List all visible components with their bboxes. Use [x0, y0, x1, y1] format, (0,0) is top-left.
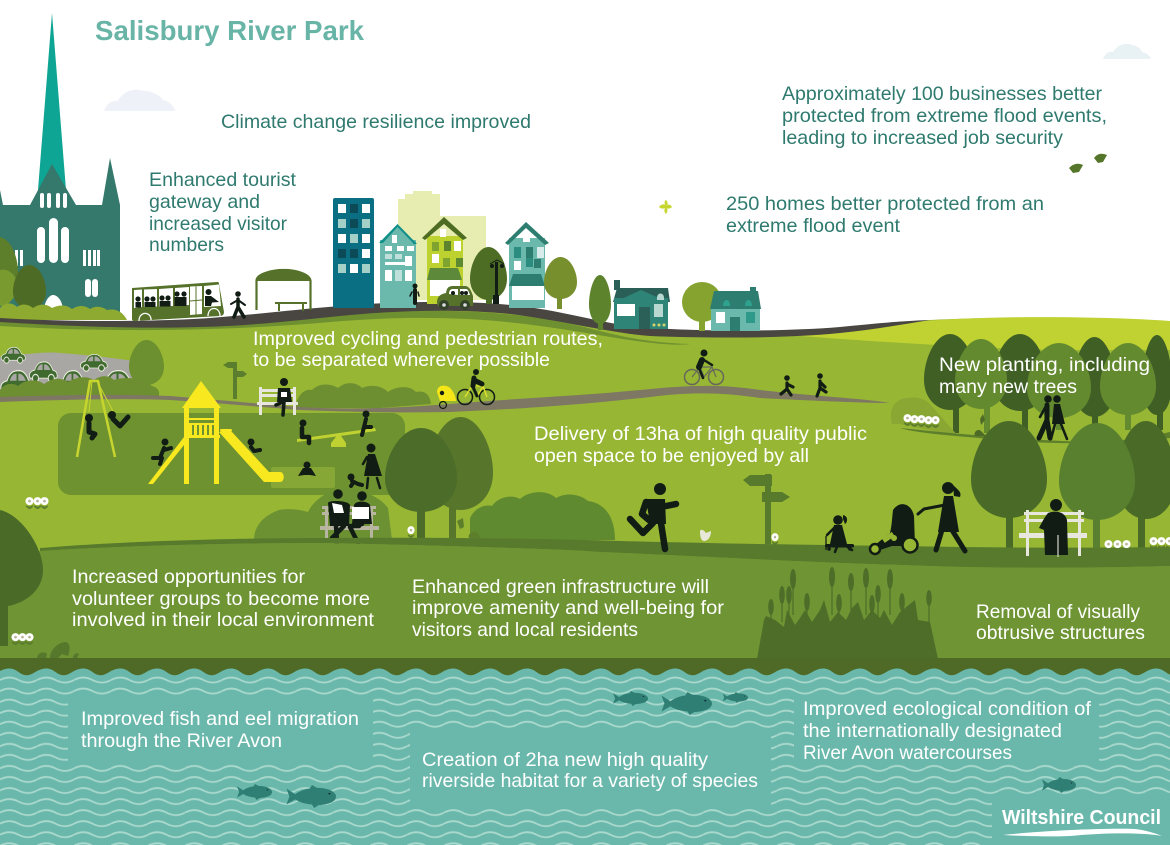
text: public open space: Delivery of 13ha of high quality public [534, 423, 867, 445]
text: businesses protected [782, 83, 1107, 149]
text: riverside habitat: Creation of 2ha new high quality [422, 749, 708, 771]
text: cycling routes: Improved cycling and pedestrian routes, [253, 328, 603, 350]
text: homes protected: extreme flood event [726, 215, 901, 237]
bank scallop edge [0, 668, 1170, 678]
crawling baby [348, 474, 362, 486]
child climbing [153, 438, 171, 464]
street tree olive [544, 257, 577, 309]
fish group bottom [237, 784, 336, 808]
cathedral body [0, 158, 120, 312]
running child 1 [781, 375, 793, 395]
river waves [0, 674, 1170, 845]
reed heads [768, 567, 932, 615]
text: ecological condition: Improved ecological condition of [803, 698, 1092, 720]
swing frame [77, 381, 115, 457]
text: visually obtrusive [976, 601, 1145, 644]
bus passengers [135, 289, 219, 308]
house teal [379, 224, 417, 308]
spire [38, 13, 66, 190]
text: new planting [939, 354, 1150, 398]
text: public open space: open space to be enjoyed by all [534, 445, 809, 467]
girl on scooter [825, 515, 854, 552]
logo: Wiltshire Council: Wiltshire Council [1002, 807, 1161, 829]
bus body [132, 282, 224, 321]
cottage light [710, 287, 761, 331]
lower green meadow [0, 543, 1170, 660]
bus shelter [256, 270, 311, 311]
river [0, 668, 1170, 845]
street tree dark [470, 247, 507, 304]
main green land [0, 303, 1170, 600]
tower block [333, 198, 374, 308]
cyclist right [684, 350, 724, 384]
town road [0, 302, 930, 338]
fish group top [613, 691, 748, 715]
text: volunteer groups [72, 566, 375, 631]
text: fish migration: through the River Avon [81, 730, 282, 752]
signpost upper [223, 362, 247, 399]
cyclist with trailer [437, 369, 494, 408]
round tree [682, 282, 722, 331]
riverbank band [0, 658, 1170, 670]
front tree row [971, 421, 1170, 550]
wave-free text panels [68, 697, 1170, 845]
parked cars [1, 347, 136, 396]
title: Salisbury River Park [95, 15, 364, 46]
bird white [700, 530, 711, 541]
text: tourist gateway: gateway and [149, 191, 260, 213]
footpath band [40, 538, 1170, 568]
text: riverside habitat: riverside habitat for a variety of species [422, 770, 758, 792]
hedge right [891, 397, 958, 436]
child on see-saw 2 [362, 410, 371, 435]
white text on green [72, 328, 1150, 644]
flower by tree [407, 526, 415, 538]
child on slide [248, 438, 260, 451]
text: ecological condition: River Avon watercourses [803, 742, 1012, 764]
signpost lower [743, 474, 790, 544]
woman with pushchair [870, 482, 965, 554]
frogs [37, 642, 79, 658]
text: public open space [534, 423, 867, 467]
text: cycling routes: to be separated wherever possible [253, 349, 550, 371]
cloud right [1103, 44, 1151, 59]
bench with elderly person [1019, 499, 1087, 557]
flower row right [903, 414, 940, 428]
text: cycling routes [253, 328, 603, 371]
text: volunteer groups: Increased opportunities for [72, 566, 306, 588]
car park tree [129, 340, 164, 385]
text: tourist gateway: increased visitor [149, 213, 287, 235]
fish right [1042, 777, 1076, 793]
text: green infrastructure: improve amenity and well-being for [412, 597, 725, 619]
cottage dark [613, 280, 670, 329]
cycle path [0, 386, 890, 412]
see-saw [297, 428, 376, 447]
text: riverside habitat [422, 749, 758, 792]
shrub row mid [296, 383, 431, 408]
cathedral trees and hedge [0, 237, 18, 304]
street lamp [490, 260, 504, 304]
squirrels [975, 414, 986, 436]
text: visually obtrusive: Removal of visually [976, 601, 1140, 623]
car park hedge [0, 376, 159, 398]
text: businesses protected: protected from extreme flood events, [782, 105, 1107, 127]
flowers along path [1104, 537, 1170, 552]
text: fish migration: Improved fish and eel migration [81, 708, 359, 730]
grey car park surface [0, 352, 135, 397]
reed stems [771, 577, 929, 625]
flying leaf [659, 200, 672, 214]
cathedral windows [15, 193, 100, 312]
squirrels centre [457, 518, 480, 538]
playground area [58, 381, 405, 495]
hill band under road [0, 311, 690, 345]
text: volunteer groups: involved in their local environment [72, 609, 375, 631]
text: green infrastructure [412, 576, 725, 641]
car green [437, 286, 473, 310]
reed mass [757, 600, 938, 659]
text: ecological condition: the internationally designated [803, 720, 1062, 742]
man with phone [410, 284, 419, 303]
readers on bench [320, 489, 379, 546]
running child 2 [817, 373, 826, 396]
hillside ridge under trees [900, 428, 1170, 443]
small flowers low-left [11, 633, 34, 645]
reed bed [757, 567, 938, 659]
lime hill right [800, 317, 1170, 350]
text: new planting: New planting, including [939, 354, 1150, 376]
text: tourist gateway: numbers [149, 234, 224, 256]
text: green infrastructure: Enhanced green infrastructure will [412, 576, 709, 598]
child on see-saw 1 [300, 420, 309, 443]
text: homes protected: 250 homes better protected from an [726, 193, 1044, 215]
climbing frame and slide [148, 381, 284, 484]
planted tree row [924, 334, 1170, 433]
text: homes protected [726, 193, 1044, 237]
pedestrian at bus [231, 291, 245, 317]
birds [1069, 154, 1107, 173]
central bushes [254, 488, 615, 540]
text: volunteer groups: volunteer groups to become more [72, 588, 370, 610]
text: visually obtrusive: obtrusive structures [976, 622, 1145, 644]
text: tourist gateway [149, 169, 297, 256]
text: businesses protected: Approximately 100 businesses better [782, 83, 1103, 105]
pale background towers [398, 191, 486, 300]
small flowers left [25, 497, 49, 509]
bus wheel arches [139, 308, 220, 321]
cathedral [0, 13, 127, 320]
cloud left [104, 90, 175, 111]
left foreground tree [0, 510, 43, 646]
text: climate change: Climate change resilience improved [221, 111, 531, 133]
buildings [333, 191, 761, 331]
text: new planting: many new trees [939, 376, 1077, 398]
walking couple [1039, 395, 1067, 439]
car park [0, 340, 164, 398]
central trees [385, 417, 493, 540]
text: ecological condition [803, 698, 1092, 764]
house teal dark roof [505, 222, 549, 308]
bus [132, 282, 224, 321]
text: businesses protected: leading to increased job security [782, 127, 1063, 149]
text: fish migration [81, 708, 359, 752]
child on swing 1 [85, 414, 95, 438]
flower by signpost [771, 533, 779, 545]
house lime [422, 217, 467, 304]
text: tourist gateway: Enhanced tourist [149, 169, 297, 191]
child in sand [298, 462, 316, 476]
bus windows [134, 284, 221, 315]
bench with reader [257, 378, 298, 415]
child on swing 2 [108, 411, 128, 426]
slim tree [589, 275, 611, 330]
sand patch [271, 467, 335, 488]
runner [630, 483, 676, 549]
text: green infrastructure: visitors and local residents [412, 619, 638, 641]
mother standing [363, 444, 382, 488]
